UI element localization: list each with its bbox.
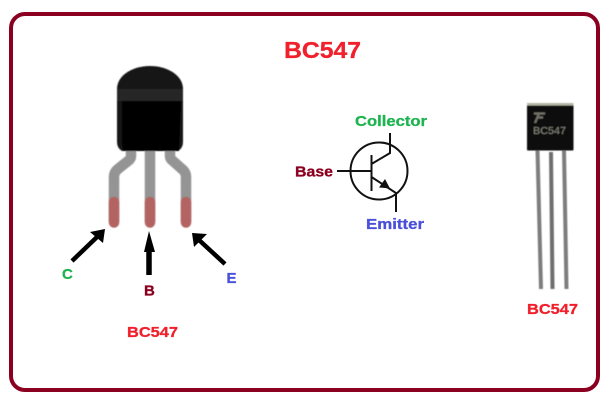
label: C: C (62, 266, 73, 283)
title: BC547 (284, 37, 361, 63)
photo body: BC547 (533, 125, 566, 137)
lead: left (114, 150, 131, 222)
caption: package: BC547 (127, 324, 178, 341)
label: Collector: Collector (355, 113, 427, 130)
icon: transistor package drawing (114, 66, 186, 222)
lead: middle (145, 150, 155, 222)
arrow: to emitter pin (192, 233, 225, 264)
label: B: B (144, 282, 155, 300)
arrow: to base pin (144, 231, 155, 275)
photo: BC547 transistor (527, 103, 574, 289)
caption: photo: BC547 (527, 301, 578, 318)
lead: right (170, 150, 186, 222)
photo leads (538, 150, 566, 289)
photo body (527, 103, 574, 150)
arrow: to collector pin (72, 229, 105, 261)
icon: NPN transistor symbol (337, 133, 408, 212)
label: Emitter: Emitter (366, 216, 424, 233)
label: Base: Base (295, 164, 333, 180)
package body (117, 66, 183, 151)
label: E: E (226, 270, 237, 287)
